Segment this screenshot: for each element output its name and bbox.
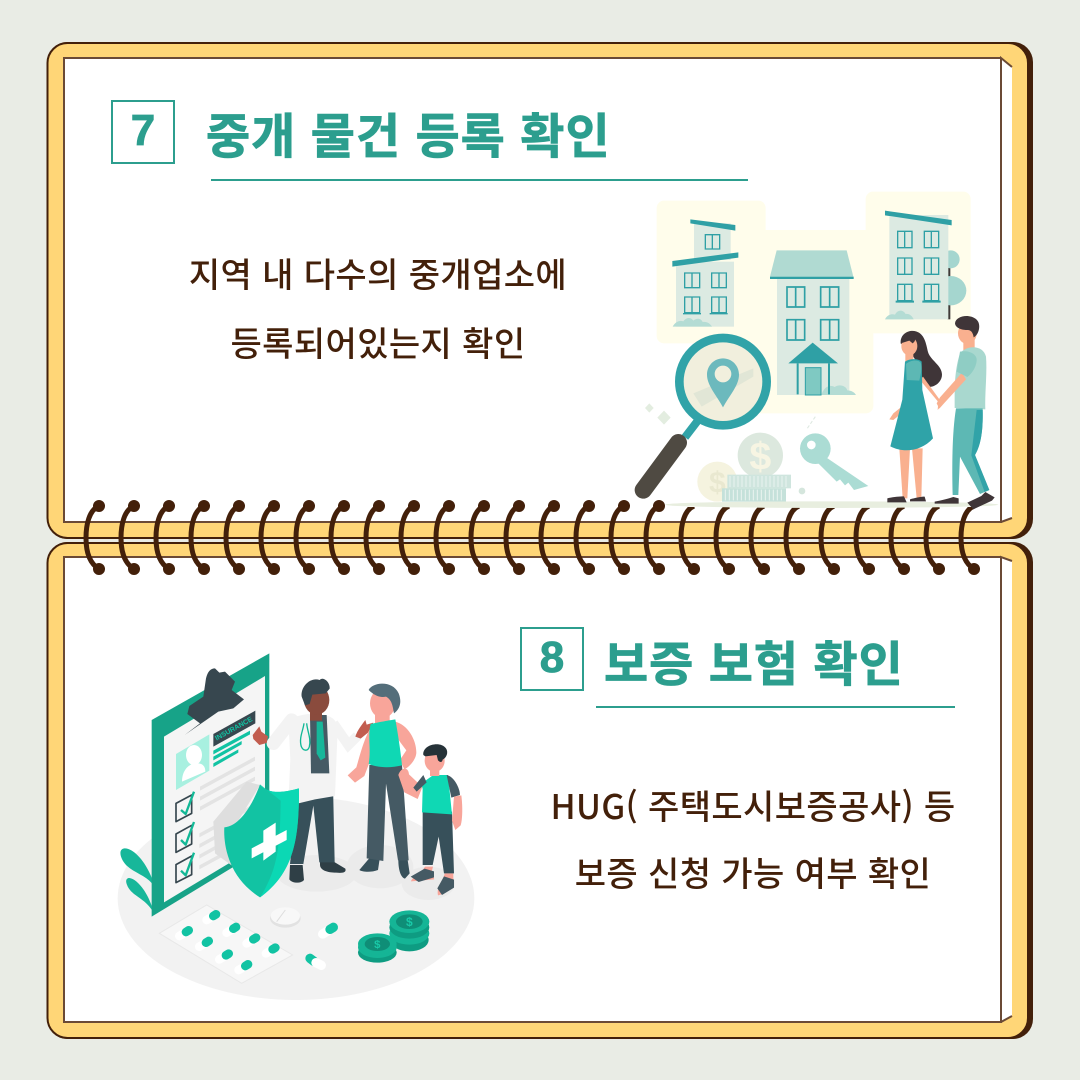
illustration: insurance clipboard, shield and family — [118, 653, 474, 1000]
icon: coin stacks: $ — [374, 939, 381, 951]
badge: number 7 — [111, 100, 175, 164]
building: right with trees — [885, 211, 966, 319]
insurance label: INSURANCE — [214, 716, 254, 742]
panel: top page frame — [48, 42, 1033, 539]
icon: tablet — [270, 907, 301, 928]
illustration: buildings, magnifier and couple — [643, 192, 998, 509]
profile photo — [176, 734, 209, 790]
title: section 8: 보증 보험 확인 — [604, 625, 904, 695]
icon: dollar coins and stacks: $ — [749, 434, 771, 478]
text: section 7 line 1: 지역 내 다수의 중개업소에 — [189, 248, 567, 297]
badge: number 7: 7 — [131, 106, 155, 155]
icon: coin stacks: $ — [406, 915, 413, 929]
icon: loose capsules — [310, 927, 333, 965]
spiral binding rings — [86, 470, 1000, 569]
icon: shield with cross — [224, 784, 299, 897]
ground — [665, 501, 998, 508]
title rule: section 7 — [211, 179, 748, 181]
title: section 7: 중개 물건 등록 확인 — [206, 97, 611, 167]
checkboxes — [176, 792, 194, 883]
title rule: section 8 — [596, 706, 955, 708]
ground disc — [118, 797, 474, 1000]
figure: child — [411, 744, 462, 895]
figure: mother — [348, 684, 422, 879]
icon: dollar coins and stacks: $ — [709, 467, 726, 500]
text: section 8 line 1: HUG( 주택도시보증공사) 등 — [550, 780, 956, 829]
clipboard — [152, 653, 269, 917]
building: centre house — [770, 250, 856, 395]
icon: blister pack of pills — [159, 905, 293, 983]
icon: key — [800, 417, 868, 490]
shadows on ground — [277, 845, 455, 900]
text: section 7 line 2: 등록되어있는지 확인 — [230, 317, 526, 366]
badge: number 8: 8 — [540, 633, 564, 682]
figure: doctor — [253, 679, 373, 883]
figure: woman — [887, 331, 942, 502]
panel: bottom page frame — [48, 542, 1033, 1039]
insurance label — [213, 711, 255, 747]
icon: dollar coins and stacks — [697, 433, 805, 502]
badge: number 8 — [520, 627, 584, 691]
background cards — [657, 192, 971, 413]
clip — [185, 668, 244, 735]
sparkles — [645, 403, 671, 425]
icon: magnifier with location pin — [643, 338, 767, 490]
text: section 8 line 2: 보증 신청 가능 여부 확인 — [575, 847, 931, 896]
icon: leaves — [120, 848, 152, 910]
figure: man — [935, 316, 995, 509]
building: left — [672, 219, 738, 327]
grey text lines — [199, 757, 255, 869]
icon: coin stacks — [358, 910, 429, 963]
